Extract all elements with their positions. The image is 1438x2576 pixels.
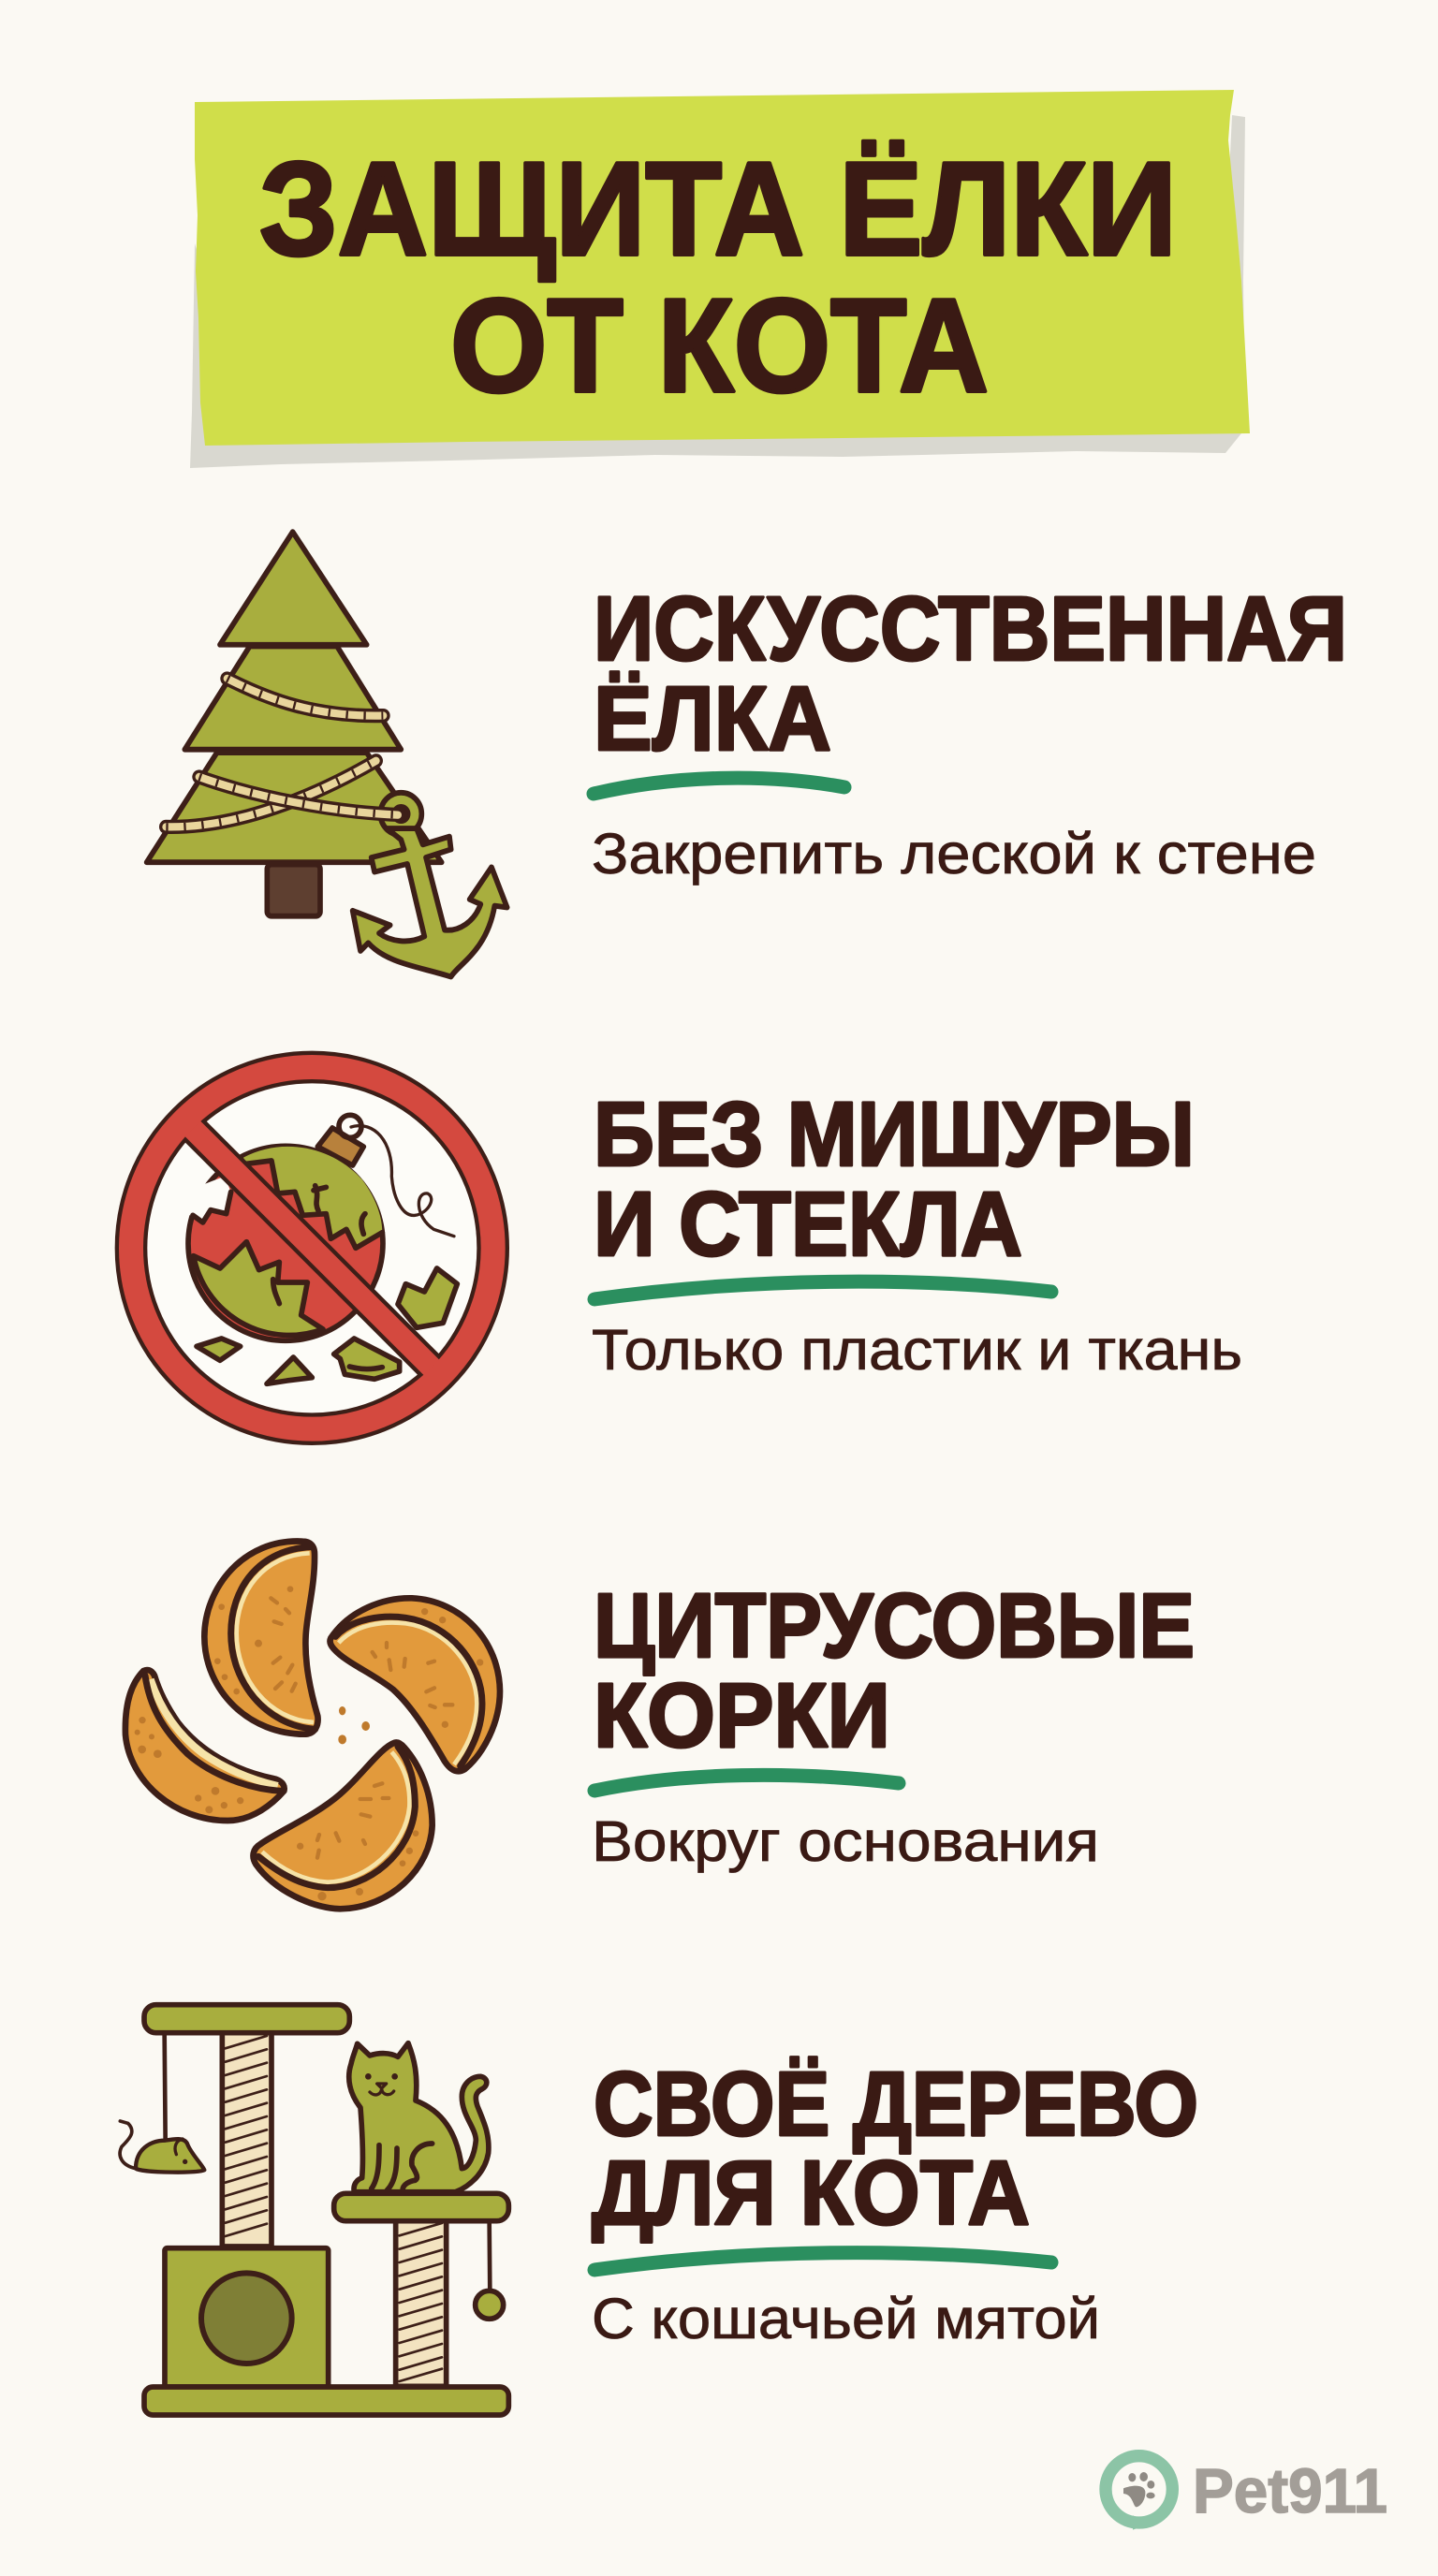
underline — [594, 1775, 899, 1791]
top platform — [144, 2005, 349, 2033]
title text: ОТ КОТА — [450, 271, 989, 420]
description: Только пластик и ткань — [592, 1318, 1242, 1382]
peel right — [330, 1598, 500, 1771]
left post — [222, 2033, 271, 2247]
heading: ЁЛКА — [594, 667, 831, 769]
base — [144, 2387, 508, 2415]
ornament — [184, 1115, 454, 1340]
logo: Pet911 — [1106, 2456, 1387, 2530]
heading: И СТЕКЛА — [594, 1173, 1022, 1275]
toy ball — [476, 2221, 504, 2319]
title text — [259, 135, 1177, 420]
peel left — [125, 1670, 285, 1821]
heading: ДЛЯ КОТА — [592, 2142, 1030, 2244]
house box — [165, 2248, 329, 2387]
panel: no tinsel or glass — [131, 1067, 1242, 1429]
heading: СВОЁ ДЕРЕВО — [594, 2053, 1198, 2155]
description: Вокруг основания — [592, 1809, 1099, 1873]
icon: cat tree with cat and toys — [120, 2005, 508, 2415]
logo text: Pet911 — [1193, 2456, 1387, 2526]
peel pores — [135, 1586, 483, 1900]
description: Закрепить леской к стене — [592, 822, 1316, 886]
cat — [349, 2043, 489, 2192]
heading — [594, 578, 1347, 769]
title banner — [190, 90, 1250, 468]
ornament shards — [197, 1268, 457, 1383]
heading: ЦИТРУСОВЫЕ — [594, 1574, 1195, 1676]
panel: artificial tree — [147, 532, 1347, 976]
icon: paw in speech bubble — [1106, 2456, 1172, 2530]
right post — [396, 2221, 447, 2386]
middle platform — [334, 2193, 508, 2221]
crumbs — [338, 1706, 370, 1744]
heading — [594, 1083, 1195, 1275]
heading — [592, 2053, 1198, 2244]
underline — [594, 778, 844, 794]
icon: four orange peels — [125, 1542, 500, 1909]
heading: ИСКУССТВЕННАЯ — [594, 578, 1347, 680]
peel top — [204, 1542, 318, 1734]
icon: tree with rope and anchor — [147, 532, 507, 976]
description: С кошачьей мятой — [592, 2287, 1100, 2350]
panel: citrus peels — [125, 1542, 1195, 1909]
underline — [594, 1281, 1051, 1299]
toy mouse — [120, 2033, 204, 2173]
title text: ЗАЩИТА ЁЛКИ — [259, 135, 1177, 284]
peel bottom — [254, 1742, 433, 1909]
icon: broken ornament in prohibition sign — [131, 1067, 493, 1429]
heading — [594, 1574, 1195, 1766]
heading: БЕЗ МИШУРЫ — [594, 1083, 1195, 1185]
underline — [594, 2253, 1051, 2270]
banner paper — [195, 90, 1250, 446]
panel: own cat tree — [120, 2005, 1198, 2415]
heading: КОРКИ — [594, 1664, 890, 1766]
